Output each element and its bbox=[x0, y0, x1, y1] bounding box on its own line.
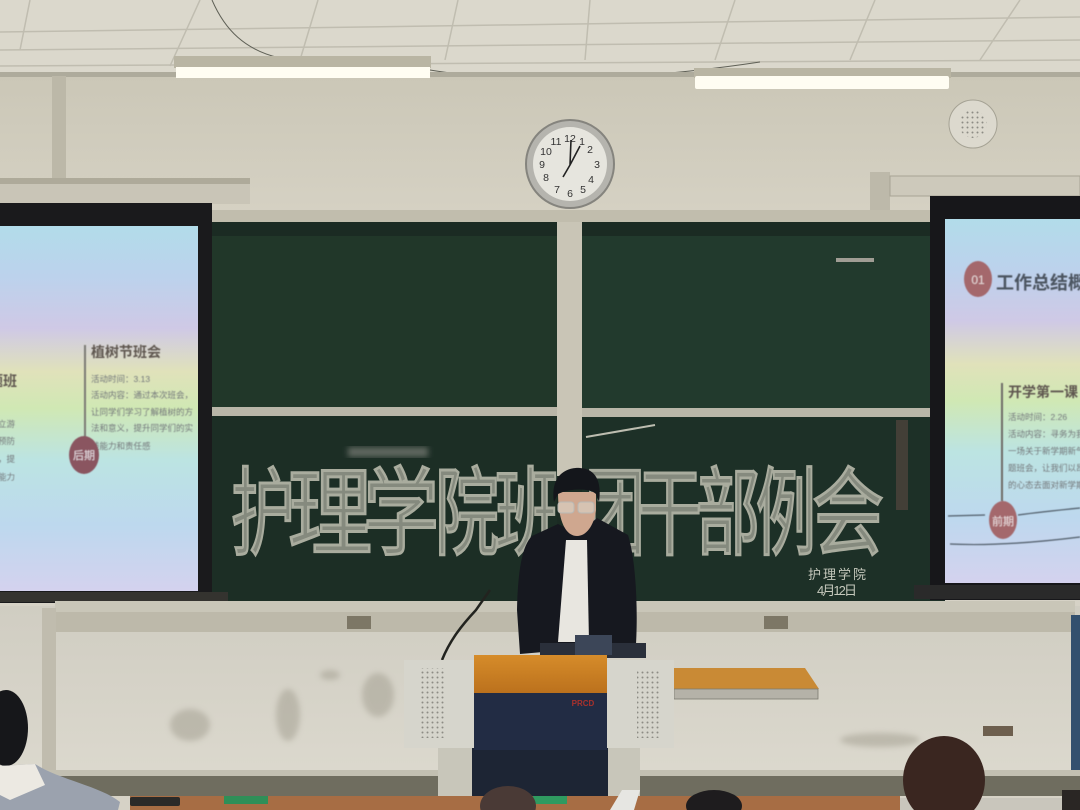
icon: wall clock bbox=[526, 120, 614, 208]
icon: wall clock: 10 bbox=[540, 146, 552, 158]
icon: wall clock: 6 bbox=[567, 188, 573, 200]
lectern: PRCD bbox=[572, 699, 595, 708]
slide text bbox=[0, 344, 193, 482]
slide text: 活动时间：3.13 bbox=[91, 374, 150, 384]
chalk signature: 4月12日 bbox=[817, 583, 857, 598]
icon: wall clock: 9 bbox=[539, 159, 545, 171]
projector screen: left bbox=[0, 203, 228, 603]
chalk tray and lower wall bbox=[0, 601, 1080, 796]
icon: wall clock: 7 bbox=[554, 184, 560, 196]
chalk title: 院 bbox=[435, 436, 499, 575]
chalk title: 班 bbox=[495, 436, 559, 575]
icon: wall clock: 8 bbox=[543, 172, 549, 184]
slide text: 活动时间：2.26 bbox=[1008, 412, 1067, 422]
icon: wall clock: 3 bbox=[594, 159, 600, 171]
icon: wall clock: 12 bbox=[564, 133, 576, 145]
speaker bbox=[517, 468, 637, 654]
chalk title: 例 bbox=[756, 437, 816, 576]
microphone bbox=[442, 590, 490, 660]
slide text: 植树节班会 bbox=[91, 344, 161, 360]
ceiling light: right bbox=[694, 68, 951, 89]
chalk signature: 护理学院 bbox=[808, 567, 866, 582]
plaster damage bbox=[170, 670, 920, 747]
slide text: 开学第一课 bbox=[1008, 384, 1078, 400]
projector screen: right bbox=[914, 196, 1080, 600]
chalk title: 理 bbox=[288, 435, 372, 575]
side shelf bbox=[672, 668, 819, 699]
wall: upper bbox=[0, 76, 1080, 222]
slide text: 让同学们学习了解植树的方 bbox=[91, 407, 193, 417]
icon: wall clock: 1 bbox=[579, 136, 585, 148]
blackboard bbox=[204, 210, 945, 606]
white t-shirt bbox=[558, 540, 589, 642]
icon: wall clock: 5 bbox=[580, 184, 586, 196]
ceiling light: left bbox=[174, 56, 431, 78]
slide text: 践能力和责任感 bbox=[91, 441, 151, 451]
slide text: 01 bbox=[971, 273, 985, 287]
chalk title: 团 bbox=[585, 437, 645, 576]
slide text bbox=[948, 261, 1080, 545]
slide text: 法和意义，提升同学们的实 bbox=[91, 423, 193, 433]
slide text: 后期 bbox=[73, 449, 95, 462]
icon: wall clock: 11 bbox=[551, 136, 562, 148]
smoke detector bbox=[949, 100, 997, 148]
lectern bbox=[404, 635, 674, 796]
icon: wall clock: 2 bbox=[587, 144, 593, 156]
slide text: 前期 bbox=[992, 514, 1014, 528]
chalk title: 护 bbox=[231, 436, 295, 575]
jacket bbox=[517, 518, 637, 654]
head bbox=[553, 468, 600, 536]
chalk title bbox=[231, 435, 884, 576]
chalk title: 学 bbox=[363, 436, 439, 575]
ceiling bbox=[0, 0, 1080, 79]
chalk title: 会 bbox=[812, 437, 884, 575]
slide text: 活动内容：通过本次班会， bbox=[91, 390, 193, 400]
icon: wall clock: 4 bbox=[588, 174, 594, 186]
chalk title: 部 bbox=[696, 436, 760, 575]
audience bbox=[0, 690, 1080, 810]
chalk title: 干 bbox=[638, 436, 702, 575]
chalk signature bbox=[808, 567, 866, 598]
desk bbox=[130, 796, 1080, 810]
